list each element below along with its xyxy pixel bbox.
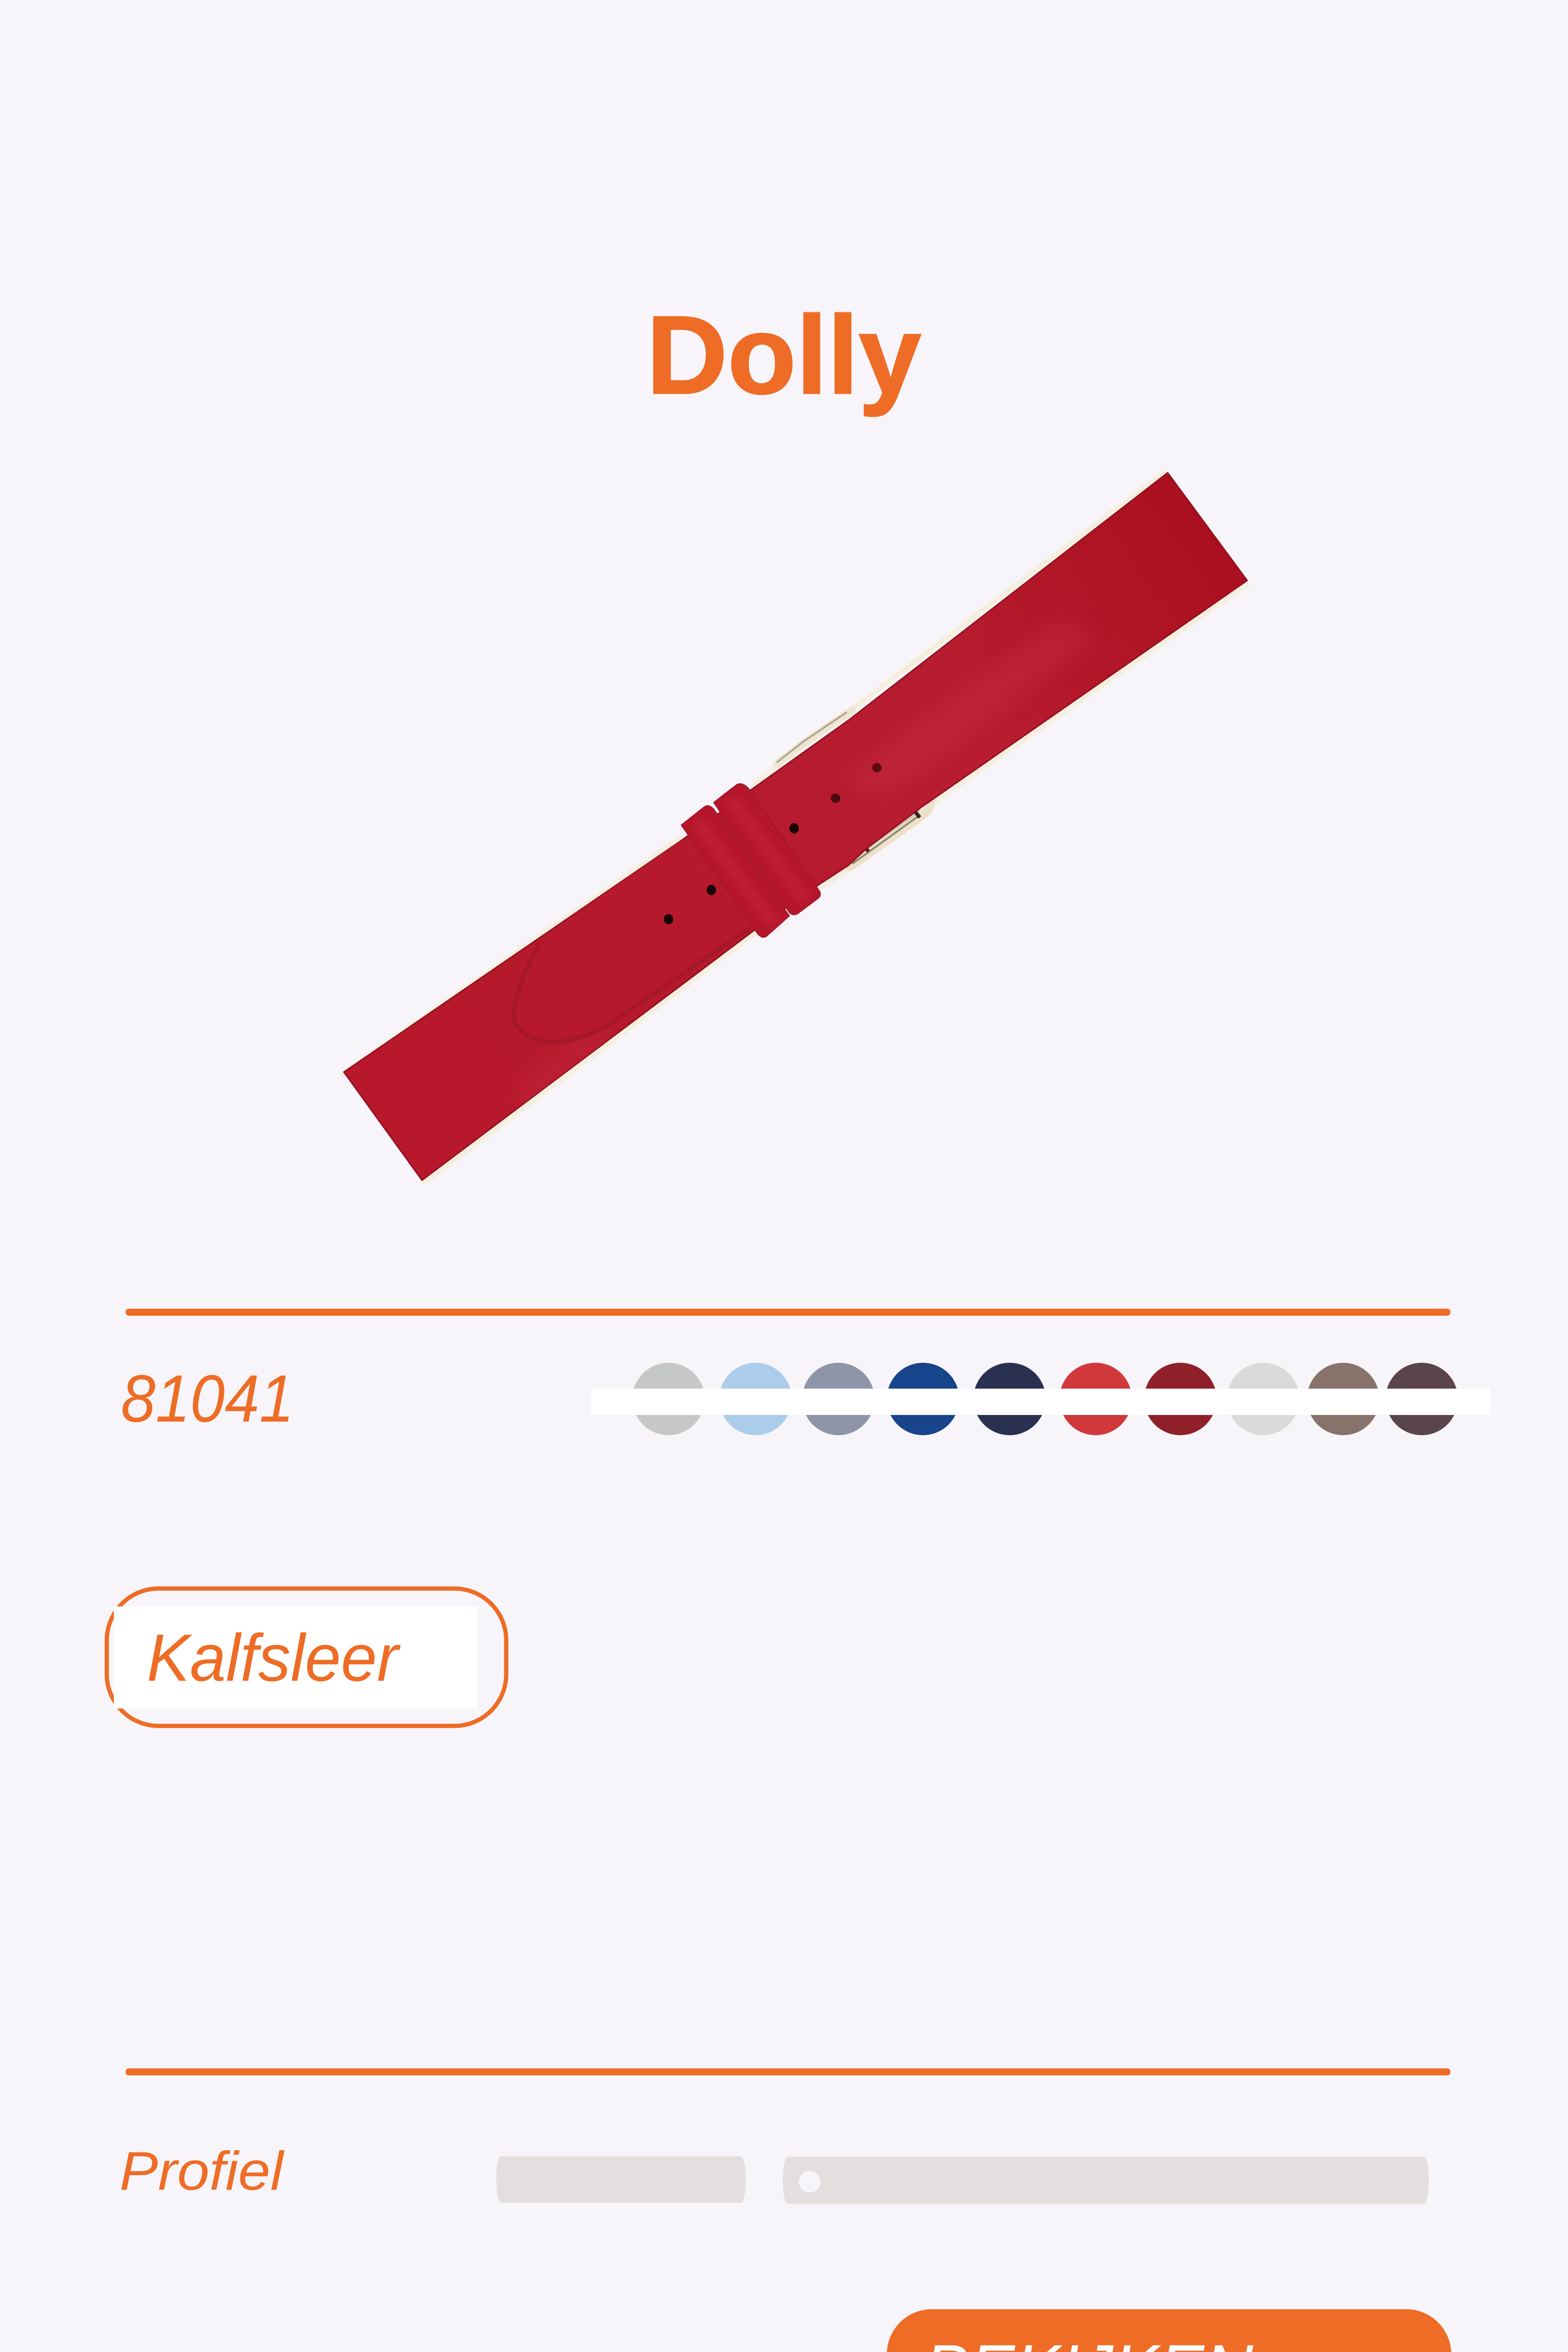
profile placeholder large [783, 2157, 1429, 2204]
profile dot [799, 2171, 820, 2193]
view button [887, 2309, 1451, 2352]
colour swatches [632, 1363, 1458, 1435]
strap body [344, 473, 1247, 1180]
product photo: red leather watch strap [341, 472, 1249, 1184]
material tag [107, 1589, 506, 1726]
tag label: Kalfsleer [147, 1621, 401, 1695]
strap edge shadow [341, 472, 1249, 1184]
strap loop left [681, 806, 789, 938]
tag white fill [114, 1606, 478, 1708]
strap highlights [517, 616, 1096, 1098]
title: Dolly [646, 293, 921, 417]
white bar over swatches [591, 1389, 1490, 1415]
divider bottom [126, 2068, 1450, 2075]
tag outline [107, 1589, 506, 1726]
strap loop right [714, 784, 820, 915]
strap holes [664, 763, 882, 924]
profile placeholder small [496, 2156, 746, 2203]
divider top [126, 1309, 1450, 1316]
profile label: Profiel [119, 2140, 285, 2201]
button shape [887, 2309, 1451, 2352]
buckle [777, 710, 931, 867]
strap tail overlay [513, 841, 749, 1042]
article number: 81041 [121, 1361, 294, 1436]
